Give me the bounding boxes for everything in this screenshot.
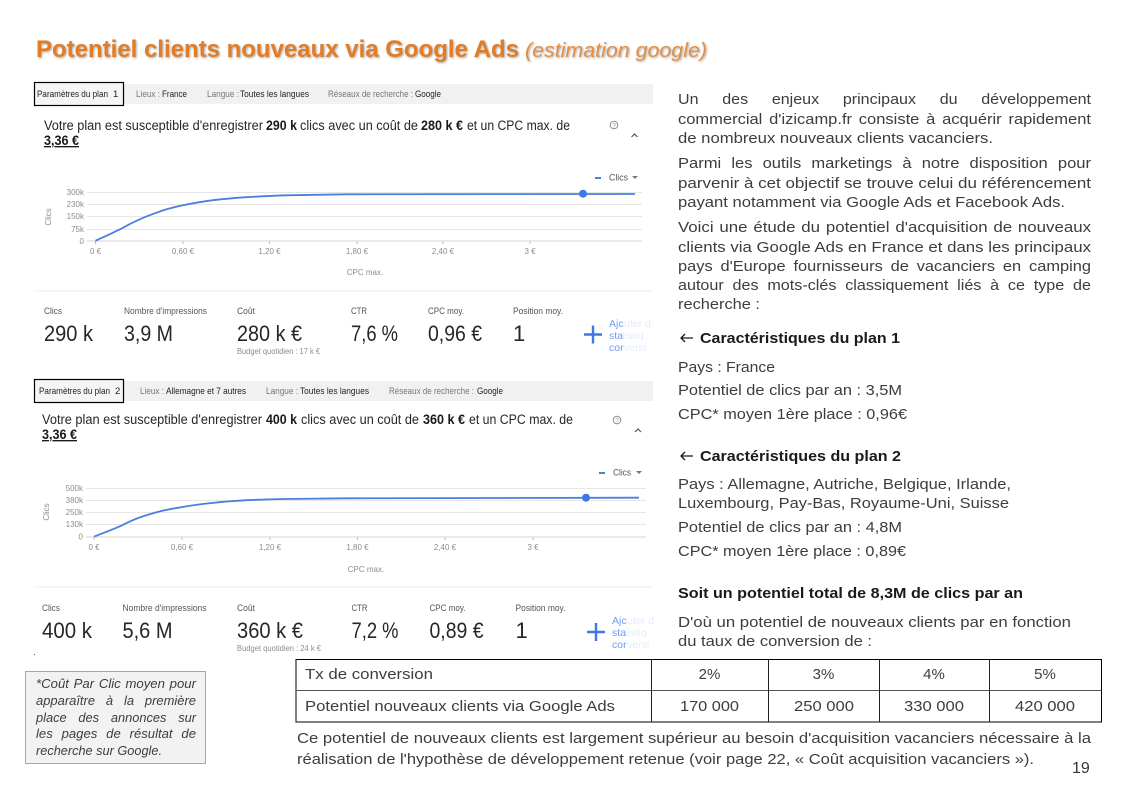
panel: plan 1 screenshot bbox=[34, 82, 653, 356]
plan 2 characteristics: Potentiel de clics par an : 4,8M bbox=[678, 519, 902, 536]
plan 1 characteristics: Pays : France bbox=[678, 359, 775, 376]
plan 2 tab box: 2 bbox=[115, 386, 120, 397]
plan 2 headline bbox=[42, 412, 573, 442]
intro text: commercial d'izicamp.fr consiste à acquérir rapidement bbox=[678, 111, 1092, 128]
conversion table: 170 000 bbox=[680, 698, 739, 715]
plan 2 settings bar bbox=[140, 386, 503, 397]
plan 1 metrics row: 280 k € bbox=[237, 321, 302, 346]
icon: add conversion stats plus: cor bbox=[609, 342, 624, 354]
icon: collapse chevron bbox=[635, 429, 641, 432]
intro text bbox=[678, 91, 1092, 313]
stray dot mark bbox=[34, 654, 35, 655]
conversion intro text: D'où un potentiel de nouveaux clients par en fonction bbox=[678, 614, 1071, 631]
intro text: parvenir à cet objectif se trouve celui du référencement bbox=[678, 175, 1092, 192]
plan 1 characteristics: Caractéristiques du plan 1 bbox=[700, 330, 900, 347]
plan 2 settings bar: Réseaux de recherche : bbox=[389, 386, 474, 397]
plan 2 metrics row: 5,6 M bbox=[122, 618, 172, 643]
conversion table: Tx de conversion bbox=[305, 666, 433, 683]
plan 2 metrics row bbox=[42, 603, 566, 653]
plan 2 line chart: 3 € bbox=[527, 543, 539, 552]
plan 2 headline: Votre plan est susceptible d'enregistrer bbox=[42, 412, 262, 427]
icon: help: ? bbox=[612, 122, 616, 130]
plan 2 line chart: 1,80 € bbox=[346, 543, 369, 552]
plan 2 settings bar: Allemagne et 7 autres bbox=[166, 386, 246, 397]
plan 1 headline: 290 k bbox=[266, 118, 297, 133]
conversion table bbox=[296, 659, 1102, 722]
intro text: de nombreux nouveaux clients vacanciers. bbox=[678, 130, 993, 147]
plan 1 settings bar: Lieux : bbox=[136, 89, 160, 100]
icon: add conversion stats plus: versi bbox=[627, 639, 649, 651]
plan 2 line chart: CPC max. bbox=[348, 565, 384, 574]
plan 2 metrics row: Budget quotidien : 24 k € bbox=[237, 643, 321, 653]
plan 1 metrics row: Nombre d'impressions bbox=[124, 306, 207, 317]
plan 1 line chart: 3 € bbox=[524, 247, 536, 256]
plan 2 metrics row: Coût bbox=[237, 603, 255, 614]
conversion table: 3% bbox=[813, 666, 834, 683]
plan 2 headline: clics avec un coût de bbox=[301, 412, 419, 427]
plan 1 line chart: 1,80 € bbox=[346, 247, 369, 256]
footnote box: place des annonces sur bbox=[35, 711, 197, 725]
plan 1 metrics row bbox=[44, 306, 563, 356]
plan 2 metrics row: 7,2 % bbox=[352, 618, 398, 643]
plan 2 line chart: 2,40 € bbox=[434, 543, 457, 552]
plan 1 line chart: 1,20 € bbox=[258, 247, 281, 256]
plan 2 headline: 400 k bbox=[266, 412, 297, 427]
plan 1 characteristics bbox=[678, 330, 908, 423]
icon: help: ? bbox=[615, 418, 619, 424]
conversion table: 4% bbox=[923, 666, 945, 683]
plan 1 metrics row: 1 bbox=[513, 321, 525, 346]
plan 2 line chart: 0 € bbox=[88, 543, 100, 552]
plan 1 metrics row: Coût bbox=[237, 306, 255, 317]
plan 2 line chart: 1,20 € bbox=[259, 543, 282, 552]
footnote box: les pages de résultat de bbox=[36, 727, 196, 741]
intro text: Voici une étude du potentiel d'acquisition de nouveaux bbox=[678, 219, 1092, 236]
plan 1 metrics row: CPC moy. bbox=[428, 306, 464, 317]
plan 2 line chart: 380k bbox=[66, 496, 84, 505]
plan 1 metrics row: Clics bbox=[44, 306, 62, 317]
plan 2 metrics row: Clics bbox=[42, 603, 60, 614]
conclusion text bbox=[297, 730, 1092, 768]
plan 2 metrics row: 1 bbox=[516, 618, 528, 643]
icon: help bbox=[610, 121, 618, 130]
conversion intro text: du taux de conversion de : bbox=[678, 633, 872, 650]
plan 1 characteristics: CPC* moyen 1ère place : 0,96€ bbox=[678, 406, 908, 423]
plan 2 metrics row: 0,89 € bbox=[430, 618, 484, 643]
plan 2 line chart: 250k bbox=[66, 508, 84, 517]
plan 1 headline: clics avec un coût de bbox=[300, 118, 418, 133]
plan 1 line chart: 0 bbox=[80, 237, 85, 246]
plan 1 line chart: 300k bbox=[67, 188, 85, 197]
plan 1 metrics row: 290 k bbox=[44, 321, 94, 346]
intro text: autour des mots-clés classiquement liés à ce type de bbox=[678, 277, 1091, 294]
plan 1 line chart: 75k bbox=[71, 225, 85, 234]
plan 1 characteristics: Potentiel de clics par an : 3,5M bbox=[678, 382, 902, 399]
conclusion text: réalisation de l'hypothèse de développement retenue (voir page 22, « Coût acquisition vacanciers »). bbox=[297, 751, 1034, 768]
plan 1 headline bbox=[44, 118, 570, 148]
intro text: recherche : bbox=[678, 296, 760, 313]
conversion table: 2% bbox=[699, 666, 720, 683]
plan 2 chart legend: Clics bbox=[613, 468, 631, 478]
intro text: pays d'Europe fournisseurs de vacanciers en camping bbox=[678, 258, 1091, 275]
plan 1 settings bar: Google bbox=[415, 89, 441, 100]
plan 1 chart legend: Clics bbox=[609, 172, 628, 184]
intro text: clients via Google Ads en France et dans les principaux bbox=[678, 239, 1092, 256]
plan 2 metrics row: CPC moy. bbox=[430, 603, 466, 614]
plan 1 line chart: Clics bbox=[44, 208, 53, 226]
footnote box: apparaître à la première bbox=[36, 694, 196, 708]
plan 1 headline: Votre plan est susceptible d'enregistrer bbox=[44, 118, 263, 133]
footnote box: *Coût Par Clic moyen pour bbox=[36, 677, 197, 691]
plan 2 settings bar: Google bbox=[477, 386, 503, 397]
conversion table: Potentiel nouveaux clients via Google Ads bbox=[305, 698, 615, 715]
plan 1 metrics row: 3,9 M bbox=[124, 321, 173, 346]
plan 2 metrics row: Position moy. bbox=[516, 603, 566, 614]
icon: help bbox=[613, 416, 621, 424]
icon: add conversion stats plus bbox=[587, 615, 654, 651]
plan 1 headline: 280 k € bbox=[421, 118, 463, 133]
plan 2 line chart: 0 bbox=[79, 532, 84, 542]
footnote box: recherche sur Google. bbox=[36, 744, 162, 758]
plan 2 line chart bbox=[42, 484, 646, 574]
conversion table: 5% bbox=[1034, 666, 1056, 683]
plan 1 metrics row: CTR bbox=[351, 306, 367, 317]
plan 1 line chart: 0,60 € bbox=[172, 247, 195, 256]
plan 1 metrics row: 7,6 % bbox=[351, 321, 398, 346]
footnote box bbox=[26, 672, 206, 764]
plan 2 headline: et un CPC max. de bbox=[469, 412, 573, 427]
conclusion text: Ce potentiel de nouveaux clients est largement supérieur au besoin d'acquisition vacanciers nécessaire à la bbox=[297, 730, 1092, 747]
icon: add conversion stats plus: Ajc bbox=[609, 318, 624, 330]
plan 1 metrics row: Position moy. bbox=[513, 306, 563, 317]
icon: add conversion stats plus: tistiq bbox=[625, 627, 647, 639]
plan 1 settings bar: Toutes les langues bbox=[240, 89, 309, 100]
plan 1 settings bar: Réseaux de recherche : bbox=[328, 89, 413, 100]
title: Potentiel clients nouveaux via Google Ads bbox=[36, 36, 519, 63]
total clicks statement: Soit un potentiel total de 8,3M de clics par an bbox=[678, 585, 1023, 602]
icon: add conversion stats plus: uter d bbox=[627, 615, 654, 627]
icon: collapse chevron bbox=[632, 134, 638, 137]
intro text: Parmi les outils marketings à notre disposition pour bbox=[678, 155, 1091, 172]
plan 2 characteristics bbox=[678, 448, 1011, 560]
plan 1 line chart bbox=[44, 188, 642, 277]
plan 2 line chart: 0,60 € bbox=[171, 543, 194, 552]
intro text: payant notamment via Google Ads et Facebook Ads. bbox=[678, 194, 1065, 211]
plan 2 line chart: Clics bbox=[42, 503, 51, 521]
plan 1 line chart: 2,40 € bbox=[432, 247, 455, 256]
conversion table: 250 000 bbox=[794, 698, 854, 715]
plan 2 metrics row: Nombre d'impressions bbox=[122, 603, 207, 614]
icon: add conversion stats plus: versi bbox=[624, 342, 646, 354]
plan 2 settings bar: Langue : bbox=[266, 386, 298, 397]
plan 1 tab box: 1 bbox=[113, 89, 118, 100]
plan 1 settings bar: Langue : bbox=[207, 89, 239, 100]
plan 2 tab box: Paramètres du plan bbox=[39, 386, 110, 397]
icon: add conversion stats plus: sta bbox=[609, 330, 623, 342]
plan 2 characteristics: Luxembourg, Pay-Bas, Royaume-Uni, Suisse bbox=[678, 495, 1009, 512]
conversion table: 420 000 bbox=[1015, 698, 1075, 715]
plan 1 line chart: 150k bbox=[67, 212, 85, 221]
plan 1 settings bar bbox=[136, 89, 441, 100]
conversion table: 330 000 bbox=[904, 698, 964, 715]
plan 1 tab box bbox=[34, 82, 124, 106]
plan 2 characteristics: CPC* moyen 1ère place : 0,89€ bbox=[678, 543, 907, 560]
plan 1 line chart: CPC max. bbox=[347, 268, 383, 277]
plan 1 headline: et un CPC max. de bbox=[467, 118, 570, 133]
plan 2 characteristics: Caractéristiques du plan 2 bbox=[700, 448, 901, 465]
conversion intro text bbox=[678, 614, 1071, 650]
plan 2 line chart: 500k bbox=[66, 484, 84, 493]
plan 1 chart legend bbox=[595, 172, 638, 184]
plan 1 headline: 3,36 € bbox=[44, 133, 79, 148]
page number: 19 bbox=[1072, 760, 1090, 777]
plan 1 metrics row: 0,96 € bbox=[428, 321, 482, 346]
icon: add conversion stats plus: Ajc bbox=[612, 615, 627, 627]
icon: add conversion stats plus: uter d bbox=[624, 318, 651, 330]
plan 1 tab box: Paramètres du plan bbox=[37, 89, 108, 100]
title: (estimation google) bbox=[525, 40, 707, 62]
icon: add conversion stats plus bbox=[584, 318, 651, 354]
plan 1 line chart: 0 € bbox=[90, 247, 102, 256]
plan 2 metrics row: 360 k € bbox=[237, 618, 303, 643]
plan 2 settings bar: Lieux : bbox=[140, 386, 164, 397]
icon: add conversion stats plus: tistiq bbox=[622, 330, 644, 342]
plan 2 settings bar: Toutes les langues bbox=[300, 386, 369, 397]
plan 2 tab box bbox=[34, 380, 124, 402]
plan 2 line chart: 130k bbox=[66, 520, 84, 529]
plan 2 headline: 360 k € bbox=[423, 412, 465, 427]
plan 1 line chart: 230k bbox=[67, 200, 85, 209]
icon: add conversion stats plus: sta bbox=[612, 627, 626, 639]
plan 1 metrics row: Budget quotidien : 17 k € bbox=[237, 346, 320, 356]
plan 2 chart legend bbox=[599, 468, 642, 478]
panel: plan 2 screenshot bbox=[34, 380, 654, 653]
plan 2 headline: 3,36 € bbox=[42, 427, 77, 442]
plan 2 metrics row: CTR bbox=[352, 603, 368, 614]
intro text: Un des enjeux principaux du développement bbox=[678, 91, 1092, 108]
icon: add conversion stats plus: cor bbox=[612, 639, 627, 651]
plan 1 settings bar: France bbox=[162, 89, 187, 100]
plan 2 characteristics: Pays : Allemagne, Autriche, Belgique, Irlande, bbox=[678, 476, 1011, 493]
plan 2 metrics row: 400 k bbox=[42, 618, 93, 643]
